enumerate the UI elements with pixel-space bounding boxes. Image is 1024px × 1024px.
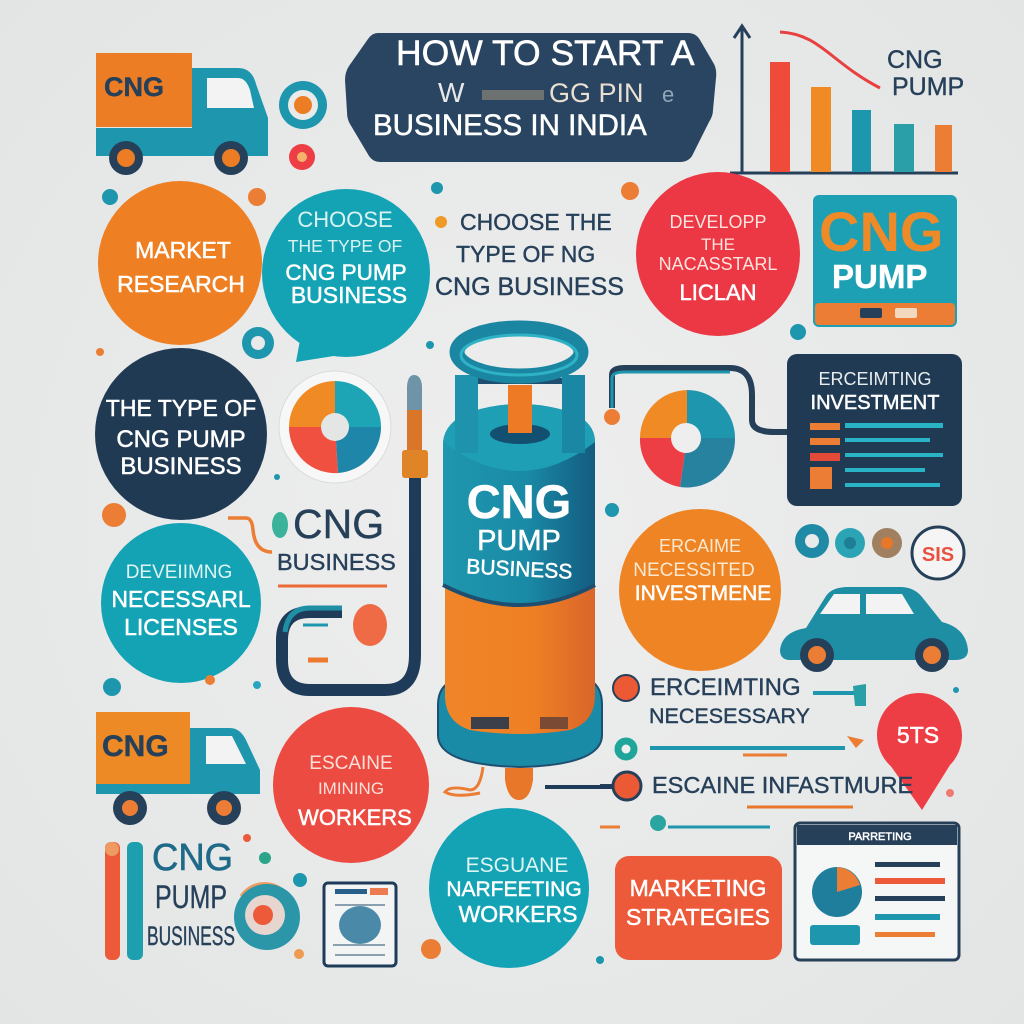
panel: browser dashboard [795,823,959,960]
circle: escaine workers: ESCAINE [309,753,393,774]
speech bubble: choose the type: CHOOSE [297,207,393,232]
circle: develop the necessary plan: DEVELOPP [669,212,767,232]
text: necessary: NECESESSARY [649,704,810,728]
bars and CNG pump business text: BUSINESS [147,921,235,951]
icon: gauges top [279,81,327,170]
card: marketing strategies [615,856,782,960]
circle: examine necessary investment: NECESSITED [633,560,755,581]
circle: type of CNG pump business: CNG PUMP [116,426,246,453]
circle: escaine workers: IMINING [318,779,384,798]
circle: escaine workers: WORKERS [298,805,412,830]
circle: examine necessary investment: INVESTMENE [635,582,771,605]
title banner: GG PIN [549,78,644,108]
pipe connector [604,368,790,432]
icon: CNG truck top: CNG [104,72,164,102]
truck bottom left: CNG [102,730,169,763]
truck bottom left [96,712,260,825]
text: CNG business: CNG [293,501,384,547]
circle: developing necessary licenses: LICENSES [124,614,238,640]
circle: develop the necessary plan [636,172,800,336]
icon: car [780,587,968,672]
circle: examine necessary investment [619,509,781,671]
text: necessary [613,674,866,757]
bar chart top right: CNG [887,46,943,74]
circle: develop the necessary plan: NACASSTARL [659,254,777,274]
text: necessary: ERCEIMTING [650,674,801,701]
CNG cylinder [438,328,602,800]
circle: marketing workers: NARFEETING [446,878,582,901]
decorative dots [96,182,959,964]
icon: CNG truck top [96,53,268,175]
bars and CNG pump business text [105,837,235,960]
text: escaine infrastructure: ESCAINE INFASTMURE [652,772,913,798]
bars and CNG pump business text: PUMP [155,879,227,915]
panel: investment list [787,354,962,506]
circle: develop the necessary plan: THE [701,235,735,254]
circle: developing necessary licenses [101,523,261,683]
icon: document [324,883,396,966]
title banner: W [438,77,465,108]
circle: market research: RESEARCH [117,271,245,297]
bar chart top right [730,26,964,173]
icon: gauges right: SIS [922,544,954,566]
CNG cylinder: PUMP [477,525,561,557]
text: choose the type of CNG business: TYPE OF NG [456,241,595,267]
text: CNG business [228,501,396,586]
bar chart top right: PUMP [892,73,964,101]
speech bubble: choose the type: BUSINESS [291,282,407,308]
circle: marketing workers [429,808,589,968]
text: choose the type of CNG business: CNG BUSINESS [435,273,624,301]
map pin: STS: 5TS [897,722,939,748]
circle: escaine workers [273,707,429,863]
title banner: HOW TO START A [396,33,695,73]
circle: marketing workers: WORKERS [459,901,577,927]
pie chart left [279,371,391,483]
title banner: BUSINESS IN INDIA [373,109,647,142]
map pin: STS [877,693,962,810]
pie chart right [640,390,735,488]
circle: type of CNG pump business: BUSINESS [120,453,242,480]
icon: target gauge [234,882,300,950]
circle: type of CNG pump business [95,348,267,520]
bars and CNG pump business text: CNG [152,837,233,879]
circle: type of CNG pump business: THE TYPE OF [106,395,256,421]
panel: browser dashboard: PARRETING [848,831,912,843]
circle: marketing workers: ESGUANE [466,854,568,877]
card: CNG pump sign: CNG [819,200,943,263]
card: CNG pump sign [813,195,957,327]
CNG cylinder: CNG [467,475,571,528]
circle: market research: MARKET [135,237,231,263]
panel: investment list: INVESTMENT [811,392,939,414]
panel: investment list: ERCEIMTING [818,369,932,389]
speech bubble: choose the type: CNG PUMP [285,260,407,285]
speech bubble: choose the type [262,189,430,362]
circle: market research [98,181,262,345]
title banner [345,33,716,162]
text: CNG business: BUSINESS [277,549,396,575]
nozzle and hose [282,375,428,690]
card: marketing strategies: STRATEGIES [626,904,770,930]
speech bubble: choose the type: THE TYPE OF [288,236,402,256]
text: choose the type of CNG business: CHOOSE THE [460,209,612,235]
CNG cylinder: BUSINESS [466,555,573,584]
text: choose the type of CNG business [435,209,624,301]
circle: examine necessary investment: ERCAIME [659,536,741,556]
circle: develop the necessary plan: LICLAN [679,280,757,305]
circle: developing necessary licenses: DEVEIIMNG [126,562,232,583]
card: CNG pump sign: PUMP [832,258,927,295]
icon: gauges right [795,524,964,579]
text: escaine infrastructure [545,772,913,807]
circle: developing necessary licenses: NECESSARL [111,586,251,612]
title banner: e [662,82,674,107]
card: marketing strategies: MARKETING [630,875,766,901]
